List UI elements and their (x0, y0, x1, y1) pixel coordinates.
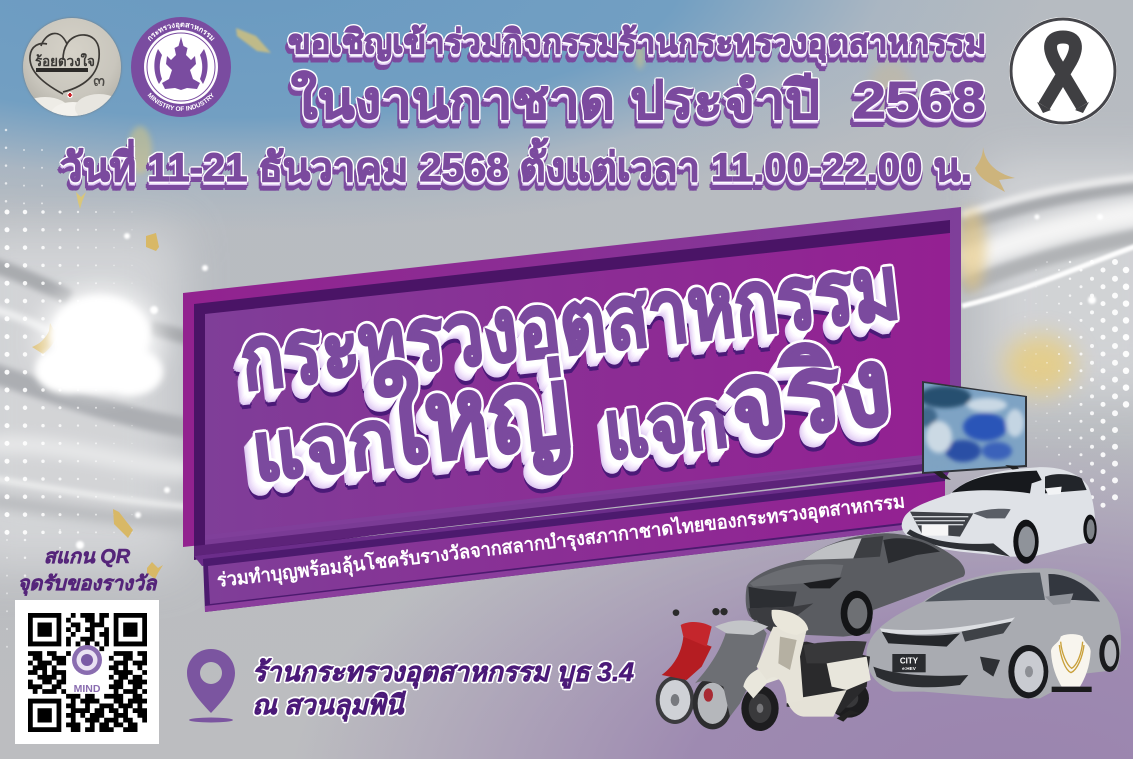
icon: location pin (187, 649, 235, 722)
QR code (15, 600, 159, 744)
icon: silver Honda City sedan (866, 568, 1121, 698)
callout: scan QR label: จุดรับของรางวัล (18, 573, 156, 595)
logo: Roi Duang Jai seal (23, 18, 121, 116)
callout: scan QR label: สแกน QR (44, 546, 130, 568)
heading line 3: date and time: วันที่ 11-21 ธันวาคม 2568 ตั้งแต่เวลา 11.00-22.00 น. (60, 146, 972, 190)
cloud glow (32, 281, 174, 404)
title line 1: กระทรวงอุตสาหกรรม (235, 237, 904, 408)
dots (6, 130, 1126, 650)
icon: red motorcycle (656, 609, 712, 724)
icon: mourning ribbon badge (1009, 17, 1117, 125)
sub-banner text: ร่วมทำบุญพร้อมลุ้นโชครับรางวัลจากสลากบำรุงสภากาชาดไทยของกระทรวงอุตสาหกรรม (216, 491, 906, 592)
logo: Ministry of Industry (131, 17, 231, 117)
icon: white hatchback car (902, 467, 1097, 564)
heading line 2: 2568 (853, 72, 986, 130)
heading line 2: ในงานกาชาด ประจำปี (291, 72, 820, 130)
logo: Roi Duang Jai seal: ร้อยดวงใจ (35, 52, 95, 69)
icon: television (922, 381, 1027, 480)
logo: Ministry of Industry: MINISTRY OF INDUSTRY (148, 92, 214, 111)
confetti (32, 147, 1015, 579)
title line 2 word: real: จริง (719, 325, 897, 463)
logo: Ministry of Industry: กระทรวงอุตสาหกรรม (148, 22, 215, 42)
icon: silver Honda City sedan: CITY (900, 656, 919, 665)
callout: scan QR label (18, 546, 158, 596)
icon: grey motorcycle (693, 608, 768, 729)
light haze behind waves (0, 230, 180, 570)
title line 2 word: give: แจก (599, 373, 732, 475)
QR code: MIND (74, 683, 101, 695)
logo: Roi Duang Jai seal: ๓ (93, 70, 105, 90)
title line 2 word: give: แจก (247, 393, 400, 497)
location text: ร้านกระทรวงอุตสาหกรรม บูธ 3.4 ณ สวนลุมพินี (252, 657, 634, 720)
icon: dark grey sedan (746, 533, 965, 637)
icon: gold necklace on stand (1051, 634, 1092, 692)
heading line 1: ขอเชิญเข้าร่วมกิจกรรมร้านกระทรวงอุตสาหกรรม (288, 23, 986, 60)
icon: cream scooter (741, 610, 871, 731)
title line 2 word: big: ใหญ่ (371, 344, 576, 489)
icon: silver Honda City sedan: e:HEV (902, 666, 917, 671)
